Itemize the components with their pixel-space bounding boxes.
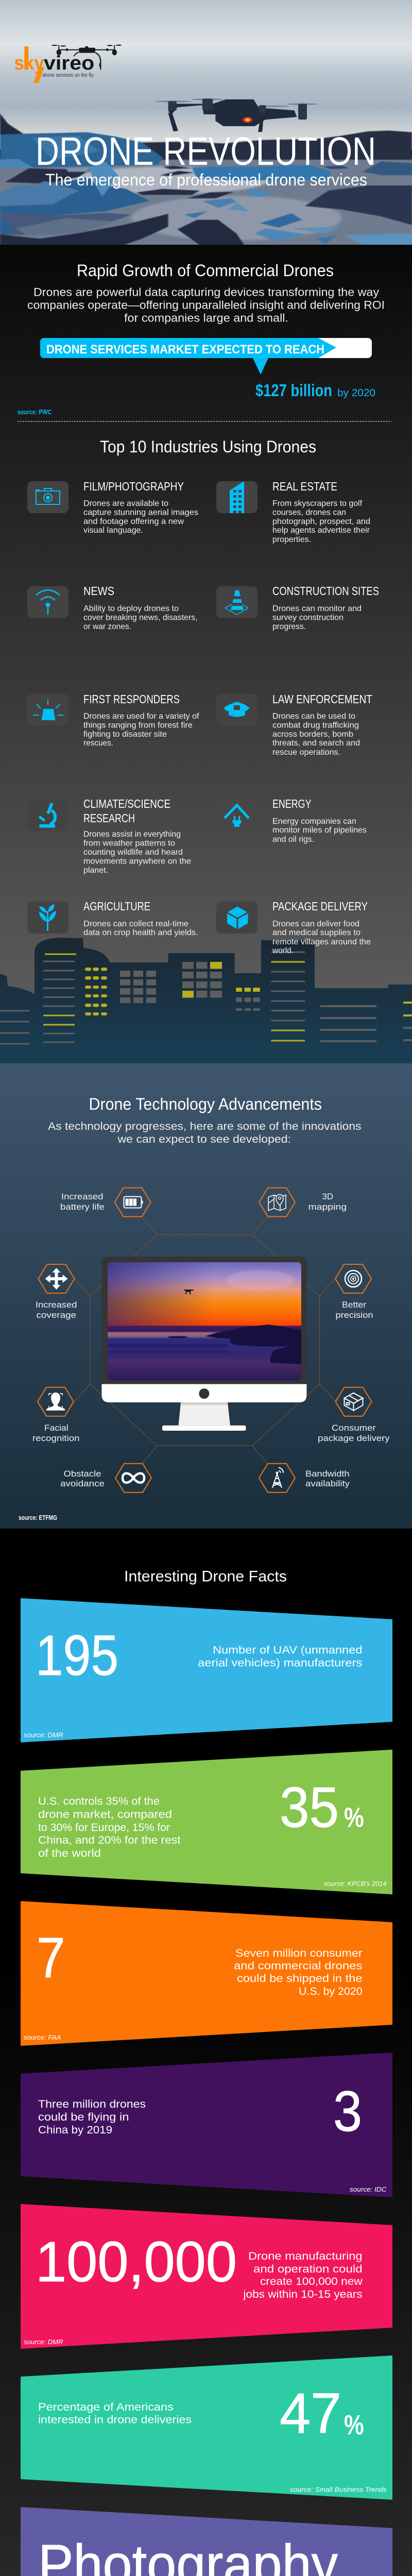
tech item: facial recognition: Facial xyxy=(44,1423,68,1433)
industry: film/photography: and footage offering a new xyxy=(83,517,184,526)
fact panel: 3: Three million drones xyxy=(38,2098,146,2110)
tech item: bandwidth availability: availability xyxy=(305,1479,350,1488)
industry: climate/science research xyxy=(27,797,191,875)
industry: first responders: FIRST RESPONDERS xyxy=(83,692,180,706)
subtitle: The emergence of professional drone services xyxy=(45,171,367,189)
logo drone silhouette xyxy=(52,44,122,70)
heading: rapid growth: Rapid Growth of Commercial Drones xyxy=(77,261,334,280)
icon: siren xyxy=(27,694,68,726)
icon: plug under roof xyxy=(216,799,258,831)
tech item: consumer package delivery: Consumer xyxy=(332,1423,376,1433)
fact panel: 47%: source: Small Business Trends xyxy=(290,2486,387,2494)
icon: building xyxy=(216,481,258,513)
fact panel: 7: Seven million consumer xyxy=(235,1947,363,1959)
fact panel: 100,000: 100,000 xyxy=(36,2230,237,2294)
industry: package delivery: and medical supplies to xyxy=(272,928,360,937)
industry: climate/science research: planet. xyxy=(83,866,108,875)
industry: package delivery: remote villages around the xyxy=(272,938,371,946)
fact panel: 3: source: IDC xyxy=(350,2185,387,2193)
source: PWC: source: PWC xyxy=(18,408,52,416)
fact panel: 35%: drone market, compared xyxy=(38,1809,172,1821)
logo: skyvireo header: drone services on the fly xyxy=(43,73,94,78)
industry: law enforcement: rescue operations. xyxy=(272,748,340,757)
dark section background xyxy=(0,245,412,1063)
tech item: better precision: Better xyxy=(342,1300,366,1310)
icon: traffic cone xyxy=(216,586,258,618)
tech item: bandwidth availability xyxy=(259,1464,350,1493)
icon: package hexagon xyxy=(336,1387,372,1416)
industry: construction sites xyxy=(216,584,379,631)
industry: package delivery: Drones can deliver food xyxy=(272,920,359,928)
industry: agriculture: AGRICULTURE xyxy=(83,900,150,913)
fact panel: 35% xyxy=(21,1750,392,1894)
fact panel: 195 xyxy=(21,1598,392,1742)
technology intro text xyxy=(48,1121,362,1145)
hero drone photo element xyxy=(155,98,318,132)
industry: first responders: Drones are used for a variety of xyxy=(83,712,199,721)
industry: real estate: From skyscrapers to golf xyxy=(272,499,363,508)
industry: film/photography: visual language. xyxy=(83,526,143,535)
market banner callout: DRONE SERVICES MARKET EXPECTED TO REACH xyxy=(46,343,324,357)
industry: agriculture xyxy=(27,900,198,937)
fact panel: 7: and commercial drones xyxy=(234,1960,363,1972)
fact panel: 47%: Percentage of Americans xyxy=(38,2401,174,2413)
fact panel: 7: U.S. by 2020 xyxy=(299,1986,363,1997)
monitor illustration xyxy=(102,1257,306,1431)
industry: construction sites: survey construction xyxy=(272,613,344,622)
market figure: $127 billion xyxy=(255,381,332,400)
icon: tower hexagon xyxy=(259,1464,295,1493)
tech item: better precision xyxy=(335,1264,373,1320)
fact panel: 3: could be flying in xyxy=(38,2111,129,2123)
tech item: 3D mapping xyxy=(259,1188,347,1217)
industry: law enforcement: across borders, bomb xyxy=(272,730,353,739)
tech item: obstacle avoidance: avoidance xyxy=(60,1479,105,1488)
fact panel: 3: China by 2019 xyxy=(38,2124,112,2136)
industry: construction sites: CONSTRUCTION SITES xyxy=(272,584,379,598)
industry: package delivery: PACKAGE DELIVERY xyxy=(272,900,368,913)
industry: law enforcement: Drones can be used to xyxy=(272,712,355,721)
industry: real estate: properties. xyxy=(272,535,311,544)
technology intro text: we can expect to see developed: xyxy=(117,1133,291,1145)
fact panel: 35%: of the world xyxy=(38,1848,101,1859)
industry: first responders: rescues. xyxy=(83,739,113,748)
fact panel: 47%: 47 xyxy=(280,2382,341,2445)
tech item: facial recognition xyxy=(32,1387,80,1443)
intro paragraph xyxy=(27,285,385,325)
fact panel: 100,000: create 100,000 new xyxy=(260,2276,363,2287)
fact panel: 47%: % xyxy=(344,2410,364,2441)
fact panel: 100,000: Drone manufacturing xyxy=(248,2250,363,2262)
industry: package delivery xyxy=(216,900,371,955)
facts section background xyxy=(0,1529,412,2576)
industry: climate/science research: RESEARCH xyxy=(83,811,135,825)
fact panel: 47% xyxy=(21,2355,392,2500)
industry: film/photography xyxy=(27,480,198,535)
industry: energy xyxy=(216,797,367,844)
industry: real estate: courses, drones can xyxy=(272,508,346,517)
tech item: bandwidth availability: Bandwidth xyxy=(305,1469,350,1479)
tech item: facial recognition: recognition xyxy=(32,1433,80,1443)
fact panel: 7: source: FAA xyxy=(24,2033,61,2041)
icon: target hexagon xyxy=(335,1264,371,1293)
tech item: 3D mapping: mapping xyxy=(308,1202,347,1212)
intro paragraph: companies operate—offering unparalleled insight and delivering ROI xyxy=(27,299,385,311)
fact panel: 7: 7 xyxy=(37,1926,65,1990)
industry: climate/science research: CLIMATE/SCIENCE xyxy=(83,797,170,810)
icon: infinity hexagon xyxy=(115,1464,151,1493)
panel: drone technology background xyxy=(0,1063,412,1529)
fact panel: 3 xyxy=(21,2053,392,2197)
logo: skyvireo header: vireo xyxy=(44,52,94,74)
fact panel: 35%: China, and 20% for the rest xyxy=(38,1835,181,1846)
fact panel: 100,000: and operation could xyxy=(253,2263,363,2275)
tech item: increased battery life: Increased xyxy=(61,1192,103,1201)
industry: news: NEWS xyxy=(83,584,114,598)
industry: energy: and oil rigs. xyxy=(272,835,314,844)
tech item: consumer package delivery xyxy=(318,1387,390,1443)
tech item: consumer package delivery: package delivery xyxy=(318,1433,390,1443)
industry: news: Ability to deploy drones to xyxy=(83,604,179,613)
industry: first responders xyxy=(27,692,199,748)
fact panel: 100,000 xyxy=(21,2204,392,2349)
icon: map hexagon xyxy=(259,1188,295,1217)
tech item: 3D mapping: 3D xyxy=(322,1192,333,1201)
industry: climate/science research: from weather patterns to xyxy=(83,839,175,848)
tech item: increased coverage: coverage xyxy=(36,1310,76,1320)
city skyline illustration xyxy=(0,938,412,1063)
heading: top 10 industries: Top 10 Industries Using Drones xyxy=(100,437,316,456)
industry: energy: monitor miles of pipelines xyxy=(272,826,367,835)
source: ETFMG: source: ETFMG xyxy=(19,1514,57,1521)
industry: news: cover breaking news, disasters, xyxy=(83,613,198,622)
logo: skyvireo header xyxy=(14,44,122,83)
fact panel: 7 xyxy=(21,1901,392,2046)
fact panel: 47%: interested in drone deliveries xyxy=(38,2414,192,2426)
tech item: obstacle avoidance xyxy=(60,1464,151,1493)
fact panel: 195: source: DMR xyxy=(24,1731,63,1739)
industry: agriculture: Drones can collect real-time xyxy=(83,920,188,928)
tech item: increased battery life: battery life xyxy=(60,1202,105,1212)
fact panel: 35%: 35 xyxy=(280,1776,339,1839)
fact panel: 195: aerial vehicles) manufacturers xyxy=(198,1657,363,1669)
fact panel: 195: 195 xyxy=(36,1624,118,1687)
industry: real estate: help agents advertise their xyxy=(272,526,370,535)
icon: box xyxy=(216,902,258,934)
industry: law enforcement xyxy=(216,692,372,757)
tech item: increased coverage: Increased xyxy=(36,1300,77,1310)
icon: police cap xyxy=(216,694,258,726)
industry: construction sites: Drones can monitor and xyxy=(272,604,362,613)
industry: first responders: things ranging from forest fire xyxy=(83,721,193,730)
industry: package delivery: world. xyxy=(272,946,294,955)
fact panel: 7: could be shipped in the xyxy=(237,1973,363,1985)
tech item: obstacle avoidance: Obstacle xyxy=(64,1469,101,1479)
fact panel: 35%: to 30% for Europe, 15% for xyxy=(38,1822,170,1834)
industry: film/photography: Drones are available to xyxy=(83,499,168,508)
industry: climate/science research: Drones assist in everything xyxy=(83,830,181,839)
industry: law enforcement: threats, and search and xyxy=(272,739,360,748)
market banner callout xyxy=(40,338,372,375)
industry: film/photography: FILM/PHOTOGRAPHY xyxy=(83,480,184,493)
industry: news xyxy=(27,584,198,631)
industry: news: or war zones. xyxy=(83,622,131,631)
industry: construction sites: progress. xyxy=(272,622,306,631)
icon: camera xyxy=(27,481,68,513)
industry: first responders: fighting to disaster site xyxy=(83,730,167,739)
industry: film/photography: capture stunning aerial images xyxy=(83,508,198,517)
icon: broadcast signal xyxy=(27,586,68,618)
fact panel: 35%: source: KPCB's 2014 xyxy=(324,1880,386,1888)
fact panel: 35%: % xyxy=(344,1802,364,1833)
fact panel: 100,000: jobs within 10-15 years xyxy=(243,2289,363,2300)
connector octagon network xyxy=(75,1217,336,1463)
heading: technology advancements: Drone Technology Advancements xyxy=(89,1095,322,1113)
industry: law enforcement: combat drug trafficking xyxy=(272,721,359,730)
industry: climate/science research: movements anywhere on the xyxy=(83,857,191,866)
icon: face scan hexagon xyxy=(38,1387,74,1416)
intro paragraph: Drones are powerful data capturing devices transforming the way xyxy=(33,285,379,299)
market figure: by 2020 xyxy=(337,387,375,399)
industry: energy: ENERGY xyxy=(272,797,312,810)
fact panel: 35%: U.S. controls 35% of the xyxy=(38,1795,160,1807)
tech item: increased coverage xyxy=(36,1264,77,1320)
industry: climate/science research: counting wildlife and heard xyxy=(83,848,183,857)
technology intro text: As technology progresses, here are some of the innovations xyxy=(48,1121,362,1132)
industry: real estate: REAL ESTATE xyxy=(272,480,337,493)
icon: arrows hexagon xyxy=(38,1264,74,1293)
fact panel: 3: 3 xyxy=(333,2080,362,2143)
icon: plant xyxy=(27,902,68,934)
fact panel: 100,000: source: DMR xyxy=(24,2338,63,2346)
intro paragraph: for companies large and small. xyxy=(124,311,288,325)
industry: real estate: photograph, prospect, and xyxy=(272,517,370,526)
icon: battery hexagon xyxy=(114,1188,150,1217)
industry: energy: Energy companies can xyxy=(272,817,356,826)
icon: microscope xyxy=(27,799,68,831)
hero photo background xyxy=(0,0,412,245)
monitor screen sunset photo xyxy=(108,1262,301,1381)
tech item: increased battery life xyxy=(60,1188,150,1217)
tech item: better precision: precision xyxy=(336,1310,373,1320)
fact panel: 195: Number of UAV (unmanned xyxy=(213,1645,363,1656)
logo: skyvireo header: sky xyxy=(14,52,44,74)
fact panel: photography xyxy=(21,2507,392,2576)
heading: interesting facts: Interesting Drone Facts xyxy=(124,1568,287,1585)
industry: real estate xyxy=(216,480,370,544)
industry: law enforcement: LAW ENFORCEMENT xyxy=(272,692,372,706)
industry: agriculture: data on crop health and yields. xyxy=(83,928,198,937)
